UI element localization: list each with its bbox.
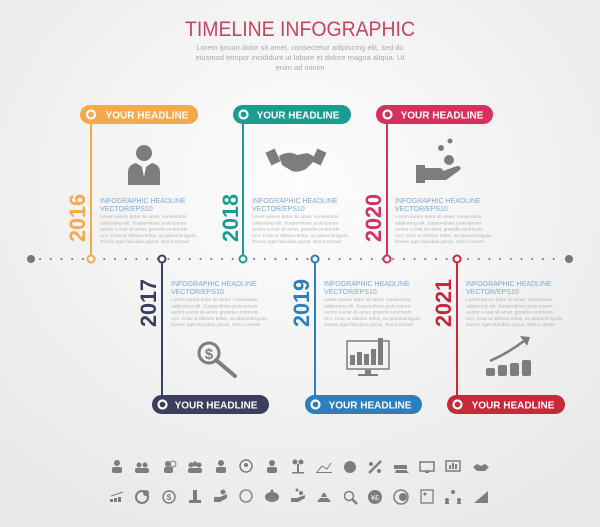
milestone 2020: 2020 [361, 194, 386, 242]
milestone 2016: YOUR HEADLINE [106, 110, 189, 122]
milestone 2018: YOUR HEADLINE [257, 110, 340, 122]
milestone 2017: VECTOR/EPS10 [171, 289, 224, 296]
icon row 1 [112, 460, 489, 474]
milestone 2019: YOUR HEADLINE [329, 400, 412, 412]
milestone 2019 [289, 256, 422, 414]
milestone 2021: 2021 [431, 279, 456, 327]
milestone 2021 [431, 256, 565, 414]
timeline axis [27, 255, 573, 263]
milestone 2020: VECTOR/EPS10 [395, 206, 448, 213]
milestone 2018 [218, 105, 351, 262]
milestone 2018: VECTOR/EPS10 [252, 206, 305, 213]
milestone 2017: INFOGRAPHIC HEADLINE [171, 281, 257, 288]
milestone 2019: VECTOR/EPS10 [324, 289, 377, 296]
subtitle: Lorem ipsum dolor sit amet, consectetur adipiscing elit, sed do [196, 43, 404, 52]
icon row 2: ¥£ [371, 495, 379, 502]
icon: monitor chart [347, 338, 389, 376]
milestone 2020 [361, 105, 493, 262]
milestone 2021: INFOGRAPHIC HEADLINE [466, 281, 552, 288]
icon: coins growth [486, 336, 531, 376]
milestone 2019: 2019 [289, 279, 314, 327]
icon: businessman [128, 145, 160, 185]
milestone 2017: YOUR HEADLINE [175, 400, 258, 412]
milestone 2020: INFOGRAPHIC HEADLINE [395, 198, 481, 205]
milestone 2020: YOUR HEADLINE [401, 110, 484, 122]
milestone 2021: YOUR HEADLINE [472, 400, 555, 412]
title: TIMELINE INFOGRAPHIC [185, 18, 415, 41]
milestone 2016: VECTOR/EPS10 [100, 206, 153, 213]
icon row 2: $ [167, 493, 172, 502]
milestone 2018: INFOGRAPHIC HEADLINE [252, 198, 338, 205]
icon: handshake [266, 149, 326, 172]
milestone 2018: 2018 [218, 194, 243, 242]
subtitle: enim ad minim [276, 63, 324, 72]
subtitle [196, 43, 405, 72]
milestone 2016 [65, 105, 198, 262]
milestone 2017 [136, 256, 269, 414]
icon: magnifier with dollar [199, 343, 235, 376]
milestone 2019: INFOGRAPHIC HEADLINE [324, 281, 410, 288]
milestone 2017: 2017 [136, 279, 161, 327]
icon: magnifier with dollar: $ [205, 346, 214, 363]
subtitle: eiusmod tempor incididunt ut labore et dolore magna aliqua. Ut [196, 53, 405, 62]
milestone 2016: INFOGRAPHIC HEADLINE [100, 198, 186, 205]
icon: hand with coins [416, 138, 461, 183]
icon row 2 [110, 488, 488, 504]
milestone 2021: VECTOR/EPS10 [466, 289, 519, 296]
milestone 2016: 2016 [65, 194, 90, 242]
